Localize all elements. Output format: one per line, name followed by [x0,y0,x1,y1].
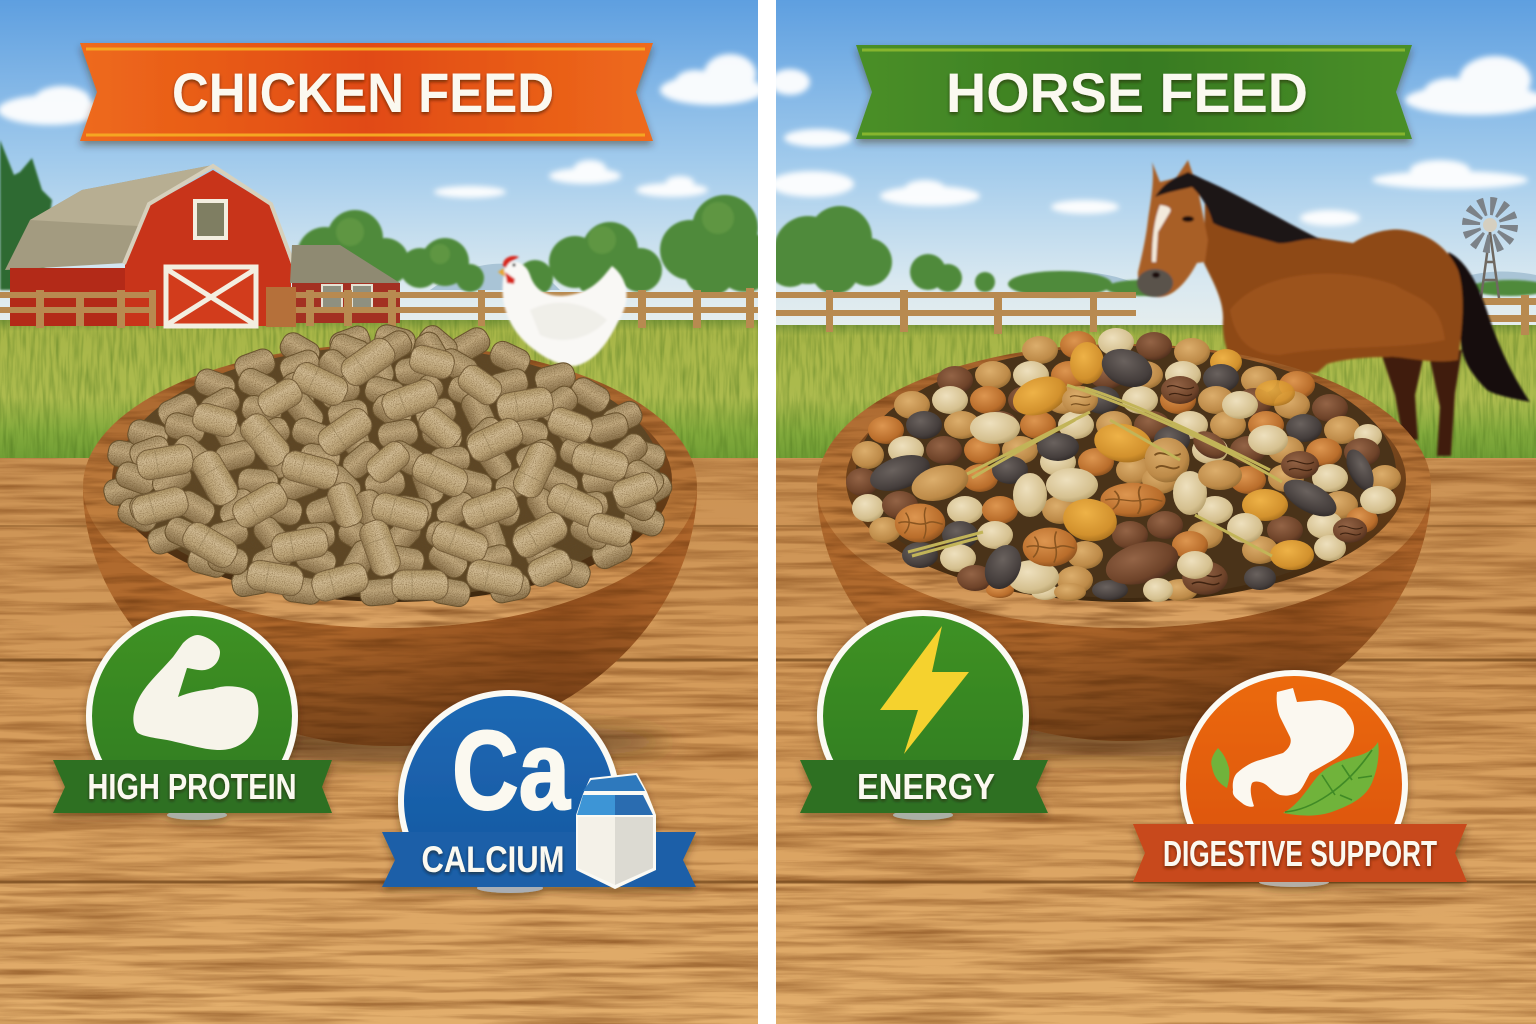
horse tail [1448,252,1530,402]
banner: horse feed [856,45,1412,139]
badge: calcium: Ca [452,708,571,833]
icon: milk carton [576,773,656,889]
hen [498,256,627,366]
wooden bowl [83,344,697,762]
panel: horse feed [768,0,1536,1024]
horse [1137,160,1530,456]
badge: high protein [53,613,332,820]
chicken feed pellets [101,321,676,608]
clouds [770,56,1536,226]
tree line [0,140,775,299]
badge: calcium [382,693,696,909]
panel: chicken feed [0,0,775,1024]
distant hills [430,264,560,290]
horse feed mix [846,328,1401,602]
banner: horse feed: HORSE FEED [946,61,1308,124]
badge: calcium: CALCIUM [422,839,564,880]
badge: digestive support: DIGESTIVE SUPPORT [1163,833,1437,874]
barn [5,165,400,327]
icon: flexed arm [133,635,258,750]
badge: energy: ENERGY [857,766,995,807]
sky [0,0,758,325]
banner: chicken feed [80,43,653,141]
wooden bowl [817,344,1431,756]
badge: high protein: HIGH PROTEIN [88,766,296,807]
icon: lightning bolt [880,626,969,754]
wooden fence [0,288,758,328]
wooden fence [776,290,1536,335]
distant hills [1066,272,1536,284]
wooden table [776,458,1536,1024]
horse head [1138,160,1208,297]
clouds [0,54,764,198]
grass field [0,320,758,460]
grass field [776,325,1536,460]
icon: leaves [1211,742,1379,816]
banner: chicken feed: CHICKEN FEED [172,61,554,124]
hay stems [908,385,1282,556]
horse mane [1155,172,1322,243]
badge: digestive support [1133,673,1467,895]
icon: windmill [1471,206,1509,298]
sky [776,0,1536,330]
wooden table [0,458,758,1024]
icon: stomach [1233,688,1354,807]
badge: energy [800,613,1048,820]
tree line [768,206,1536,297]
horse legs [1380,350,1462,456]
horse body [1204,200,1463,373]
